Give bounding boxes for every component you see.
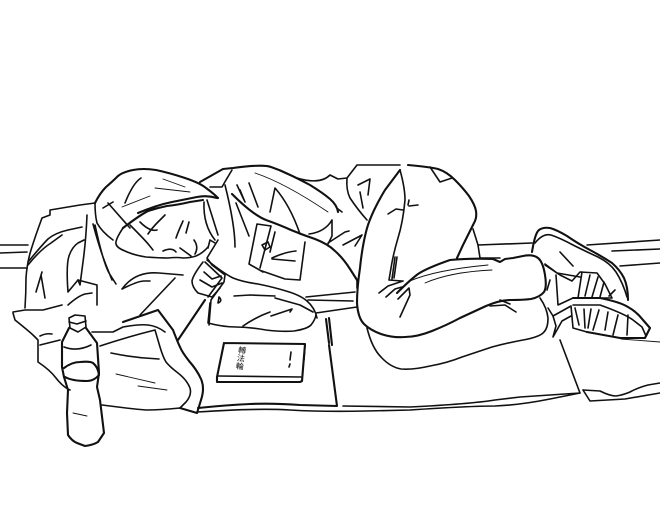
sneaker: upper shoe	[532, 228, 628, 305]
background wall lines	[0, 240, 660, 268]
sneaker: lower shoe	[548, 298, 650, 338]
water bottle	[62, 315, 104, 446]
hood and face	[95, 169, 218, 258]
pillow	[207, 260, 357, 331]
upper body jacket	[200, 165, 400, 288]
floor mat	[197, 318, 660, 412]
backpack and jacket pile	[13, 203, 205, 413]
sneakers	[532, 228, 650, 338]
hand holding phone	[192, 240, 225, 325]
book title: 轉法輪	[235, 345, 247, 372]
legs	[357, 165, 548, 369]
book: 轉法輪	[217, 343, 305, 382]
